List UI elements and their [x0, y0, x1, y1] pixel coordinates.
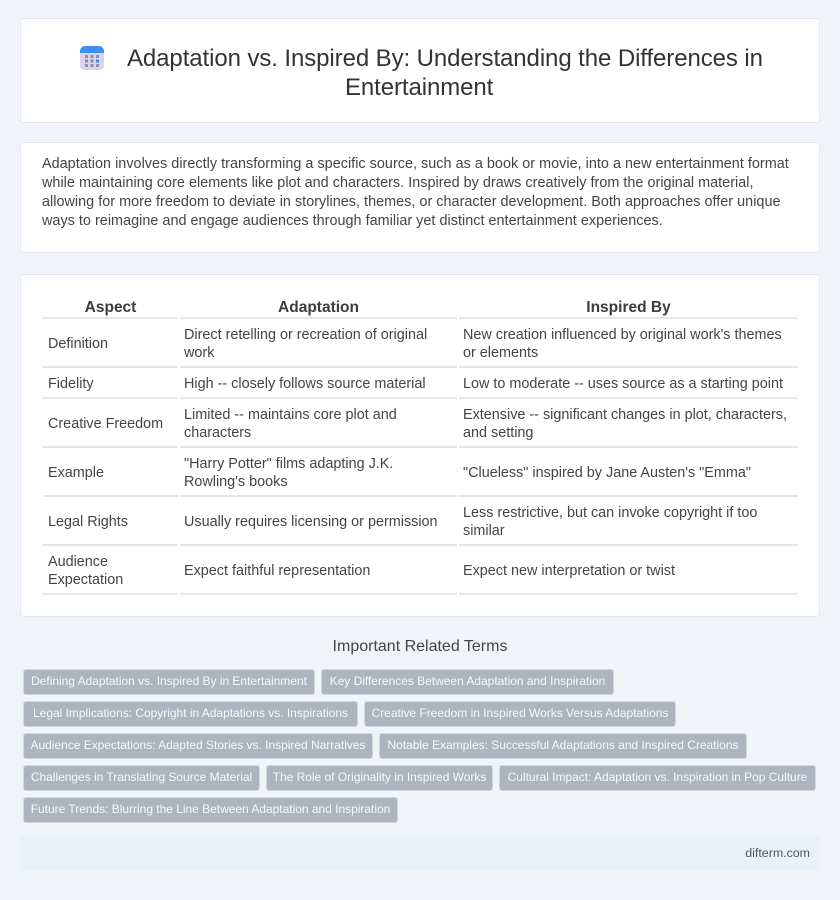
tag	[266, 765, 493, 791]
table: or elements	[463, 345, 538, 361]
tag	[499, 765, 816, 791]
row: audience expectation	[48, 554, 123, 588]
row: audience expectation: Audience	[48, 554, 108, 570]
tag	[23, 765, 260, 791]
footer bar	[20, 836, 820, 870]
intro text: Adaptation involves directly transforming a specific source, such as a book or movie, into a new entertainment format	[42, 156, 789, 172]
title: Adaptation vs. Inspired By: Understanding the Differences in	[127, 45, 763, 72]
table: work	[184, 345, 214, 361]
table: Expect faithful representation	[184, 563, 370, 579]
tag	[321, 669, 614, 695]
intro text: ways to reimagine and engage audiences through familiar yet distinct entertainment experiences.	[42, 213, 663, 229]
table: Low to moderate -- uses source as a starting point	[463, 376, 783, 392]
table: New creation influenced by original work's themes	[463, 327, 782, 343]
table: Less restrictive, but can invoke copyright if too	[463, 505, 757, 521]
related terms heading: Important Related Terms	[333, 638, 507, 655]
tag: Defining Adaptation vs. Inspired By in Entertainment	[31, 674, 307, 688]
row: definition: Definition	[48, 336, 108, 352]
table: High -- closely follows source material	[184, 376, 426, 392]
tag	[23, 733, 373, 759]
intro text: allowing for more freedom to deviate in storylines, themes, or character development. Both approaches offer unique	[42, 194, 781, 210]
table: Extensive -- significant changes in plot, characters,	[463, 407, 787, 423]
tag	[23, 797, 398, 823]
column heading: inspired by: Inspired By	[586, 299, 671, 316]
table: Direct retelling or recreation of original	[184, 327, 427, 343]
row: audience expectation: Expectation	[48, 572, 123, 588]
table: Usually requires licensing or permission	[184, 514, 438, 530]
title	[127, 45, 763, 101]
comparison table panel	[20, 274, 820, 617]
footer source: difterm.com	[745, 846, 810, 860]
table: and setting	[463, 425, 533, 441]
tag: Challenges in Translating Source Material	[31, 770, 252, 784]
table: Expect new interpretation or twist	[463, 563, 675, 579]
column heading: aspect: Aspect	[85, 299, 136, 316]
tag: The Role of Originality in Inspired Works	[273, 770, 486, 784]
tag: Notable Examples: Successful Adaptations and Inspired Creations	[388, 738, 738, 752]
row: creative freedom: Creative Freedom	[48, 416, 163, 432]
icon: calendar	[80, 46, 104, 70]
tag: Legal Implications: Copyright in Adaptations vs. Inspirations	[33, 706, 348, 720]
tag	[23, 701, 358, 727]
tag	[364, 701, 676, 727]
tag: Key Differences Between Adaptation and Inspiration	[330, 674, 605, 688]
tag: Creative Freedom in Inspired Works Versus Adaptations	[372, 706, 668, 720]
table: characters	[184, 425, 251, 441]
tag: Cultural Impact: Adaptation vs. Inspiration in Pop Culture	[508, 770, 807, 784]
table: Rowling's books	[184, 474, 288, 490]
row: legal rights: Legal Rights	[48, 514, 128, 530]
tag	[379, 733, 747, 759]
intro text	[42, 156, 789, 229]
header panel	[20, 18, 820, 123]
tag	[23, 669, 315, 695]
table	[43, 299, 798, 595]
table: Limited -- maintains core plot and	[184, 407, 397, 423]
table: similar	[463, 523, 505, 539]
table: "Harry Potter" films adapting J.K.	[184, 456, 393, 472]
row: example: Example	[48, 465, 104, 481]
title: Entertainment	[345, 74, 493, 101]
intro text: while maintaining core elements like plot and characters. Inspired by draws creatively from the original material,	[42, 175, 754, 191]
table: "Clueless" inspired by Jane Austen's "Emma"	[463, 465, 751, 481]
tag: Audience Expectations: Adapted Stories vs. Inspired Narratives	[31, 738, 365, 752]
intro panel	[20, 142, 820, 253]
row: fidelity: Fidelity	[48, 376, 94, 392]
related terms tags	[23, 669, 816, 823]
column heading: adaptation: Adaptation	[278, 299, 359, 316]
tag: Future Trends: Blurring the Line Between Adaptation and Inspiration	[31, 802, 390, 816]
